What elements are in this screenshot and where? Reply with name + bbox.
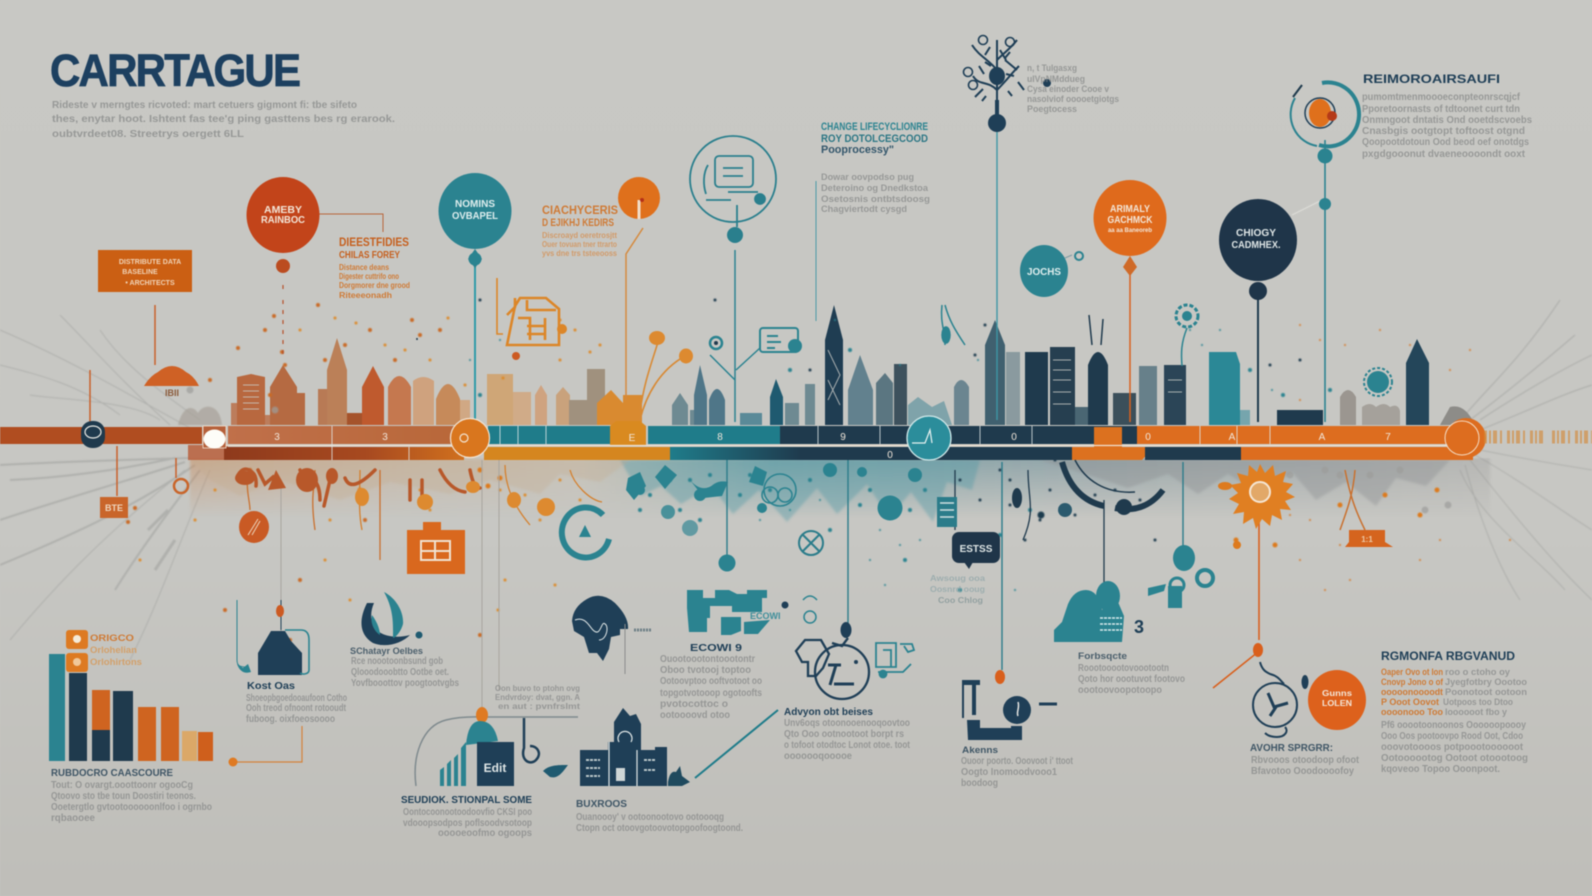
bar chart: legend text: Orlohirtons (90, 657, 142, 667)
text: mixed orange lines: oooonooo Too (1381, 707, 1443, 717)
circle: orange clock label: Gunns (1322, 689, 1353, 698)
band: right dashes (1484, 430, 1592, 444)
text: bottom right block: Pf6 ooootoonoonos Oooooopoooy (1381, 720, 1526, 731)
bar chart: bars (49, 654, 65, 761)
text: orange block left: Digester cuttrifo ono (339, 272, 399, 281)
text: clock note: AVOHR SPRGRR: (1250, 743, 1333, 754)
text: teal heading block: Chagviertodt cysgd (821, 204, 907, 215)
text: civic note: Ctopn oct otoovgotoovotopgoofoogtoond. (576, 823, 743, 834)
text: bar chart note: Qtoovo sto tbe toun Doostiri teonos. (51, 791, 196, 802)
line: teal ring stem (710, 250, 760, 422)
text: dropper note: fuboog. oixfoeosoooo (246, 714, 335, 725)
icon: orange umbrella: IBII (165, 388, 179, 398)
icon: gear orange side blobs (1218, 482, 1241, 549)
node: orange circle (450, 418, 490, 458)
band: numerals: 3 (382, 432, 388, 443)
text: bottom right block: Ooo Oos pootoovpo Rood Oot, Cdoo (1381, 731, 1523, 742)
circle: small teal: JOCHS (1027, 267, 1061, 278)
text: growth chart note: Oontocoonootoodoovfio CKSI poo (403, 807, 532, 818)
icon: orange small crate: BTE (105, 503, 123, 513)
skyline (178, 305, 1475, 425)
text: top right block: Cnasbgis ootgtopt toftoost otgnd (1362, 126, 1525, 137)
line: tree stem (996, 130, 998, 420)
text: orange block centre (542, 203, 618, 258)
text: crescent note: Rce noootoonbsund gob (351, 656, 443, 667)
text: growth chart note: SEUDIOK. STIONPAL SOME (401, 794, 532, 806)
intro text (52, 100, 395, 140)
text: teal heading block: CHANGE LIFECYCLIONRE (821, 121, 928, 133)
icon: gear ring (799, 531, 823, 555)
band: numerals: 8 (717, 432, 723, 443)
text: mixed orange lines: Cnovp Jono o of (1381, 677, 1444, 687)
intro text: oubtvrdeet08. Streetrys oergett 6LL (52, 129, 244, 140)
circle: orange label right: ARIMALY (1110, 204, 1150, 215)
text: dropper note: Kost Oas (247, 681, 295, 692)
text: tree notes: Poegtocess (1027, 104, 1077, 114)
node: white marker (203, 426, 226, 448)
text: mixed orange lines: roo o ctoho oy (1445, 667, 1510, 677)
circle: navy label: CHIOGY (1236, 228, 1276, 239)
icon: teal outlined document ring (690, 136, 776, 243)
band: numerals: 7 (1385, 432, 1391, 443)
line: orange circle stem (1129, 272, 1131, 422)
icon: clock with stem (1253, 643, 1308, 737)
text: mixed orange lines: ooooonoooodt (1381, 687, 1443, 697)
text: dropper note (246, 681, 347, 725)
bar chart: legend text: ORIGCO (90, 633, 134, 643)
splatter: orange (128, 305, 480, 640)
text: top right block (1362, 72, 1532, 160)
text: blocks note (660, 643, 762, 721)
text: dropper note: Ooh treod ofnoont rotooudt (246, 703, 346, 714)
icon: target ring (1291, 82, 1359, 210)
text: machine note: boodoog (961, 778, 998, 789)
icon: teal chat card (760, 328, 802, 353)
icon: dark civic buildings (580, 708, 778, 786)
icon: head silhouette (572, 596, 651, 674)
icon: teal blocks map: ECOWI (750, 611, 780, 621)
intro text: thes, enytar hoot. Ishtent fas tee'g ping gasttens bes rg erarook. (52, 114, 395, 125)
text: crescent note: SChatayr Oelbes (350, 646, 423, 657)
text: bottom right block: ooovotoooos potpoootoooooot (1381, 742, 1524, 753)
text: civic note (576, 799, 743, 834)
text: orange block left: Riteeeonadh (339, 291, 392, 300)
circle: orange clock label (1308, 670, 1366, 730)
icon: orange outlined house (497, 278, 567, 360)
text: person note: oootoovoopotoopo (1078, 685, 1162, 696)
text: clock note: Bfavotoo Ooodoooofoy (1251, 766, 1354, 777)
icon: brown mushroom blobs (235, 468, 338, 492)
circle: orange label right (1094, 180, 1166, 276)
text: top right block: Pporetoornasts of tdtoonet curt tdn (1362, 104, 1520, 115)
text: under bubble: Oosnrd ooug (930, 585, 985, 594)
icon: dropper bottle (237, 600, 309, 675)
icon: teal drop centre (878, 496, 902, 520)
icon: teal person with card: 3 (1134, 617, 1144, 637)
text: civic note: Ouanoooy' v ootoonootovo ootoooqg (576, 812, 724, 823)
icon: teal sprig (942, 305, 965, 345)
icon: orange platform (1345, 530, 1393, 547)
skyline: blue buildings (672, 305, 1475, 425)
text: clock note: Rbvooos otoodoop ofoot (1251, 755, 1360, 766)
icon: orange ring (174, 479, 188, 493)
band: warm wash (188, 445, 228, 460)
text: machine note: Oogto Inomoodvooo1 (961, 767, 1057, 778)
icon: teal shapes under band (626, 463, 922, 536)
text: orange block centre: Discroayd oeretrosjtt (542, 231, 617, 240)
text: mixed orange lines (1381, 667, 1528, 717)
text: mixed orange lines: Oaper Ovo ot Ion (1381, 667, 1443, 677)
text: growth chart note (401, 794, 532, 839)
icon: orange umbrella (144, 366, 199, 398)
text: under bubble (930, 574, 986, 605)
timeline band (0, 416, 1592, 461)
icon: orange gear (1229, 464, 1295, 529)
text: bar chart note (51, 768, 212, 824)
rays: left and right gray bursts (0, 300, 1592, 660)
text: growth chart note: vdooopsodpos poflsoodvsotoop (403, 818, 532, 829)
icon: orange drops on sprouts (649, 331, 693, 364)
text: blocks note: ootoooovd otoo (660, 710, 730, 721)
text: person note: Forbsqcte (1078, 651, 1127, 662)
band: numerals: 3 (274, 432, 280, 443)
text: teal heading block: Deteroino og Dnedkstoa (821, 183, 929, 194)
icon: teal ring cluster (762, 474, 796, 506)
text: bottom right block (1381, 649, 1528, 775)
text: blocks note: Ouootoootontoootontr (660, 654, 755, 665)
text: teal heading block: Pooprocessy" (821, 144, 894, 156)
line: target ring stem (1324, 140, 1326, 422)
icon: tree burst (964, 36, 1051, 132)
bar chart: legend text (90, 633, 142, 667)
text: teal heading block (821, 121, 930, 215)
icon: teal blocks map (687, 590, 788, 635)
skyline: antennas and window detail (243, 350, 1182, 409)
icon: small teal badge (710, 337, 722, 349)
icon: orange platform: 1:1 (1361, 535, 1373, 544)
icon: chat bubble: ESTSS (960, 544, 993, 555)
line: heading bracket (815, 181, 817, 321)
band: numerals: 0 (1011, 432, 1017, 443)
text: face note (784, 707, 911, 762)
band: gold lower (484, 447, 676, 460)
icon: orange badge circle (239, 511, 269, 543)
circle: orange label right: GACHMCK (1108, 215, 1153, 226)
band: mixed lower (1072, 427, 1154, 460)
text: crescent note (350, 646, 459, 689)
icon: teal outlined tool (876, 643, 914, 678)
text: top right block: pumomtmenmoooeconpteonrscqjcf (1362, 92, 1521, 103)
text: orange block centre: yvs dne trs tsteeooss (542, 249, 618, 258)
icon: teal flower top (1176, 305, 1198, 366)
icon: teal card (937, 497, 957, 527)
splatter: dark (480, 300, 1300, 540)
text: floating note (495, 683, 580, 711)
text: blocks note: Ootoovptoo ooftvotoot oo (660, 676, 762, 687)
node: dark start marker (81, 421, 105, 448)
icon: machine (962, 670, 1057, 740)
text: bar chart note: RUBDOCRO CAASCOURE (51, 768, 173, 779)
circle: navy label: CADMHEX. (1232, 240, 1281, 251)
circle: red label: AMEBY (264, 205, 302, 216)
text: orange block left: Dorgmorer dne grood (339, 281, 410, 290)
text: face note: o tofoot otodtoc Lonot otoe. toot (784, 740, 911, 751)
lines: lower drips (281, 460, 499, 710)
line: dark circle stem (1257, 298, 1259, 422)
splatter: teal (480, 350, 1330, 590)
band: numerals: 9 (840, 432, 846, 443)
bar chart (49, 630, 213, 761)
line: red circle stem (282, 285, 284, 360)
text: mixed orange lines: P Ooot Oovot (1381, 697, 1439, 707)
text: orange block left: Distance deans (339, 263, 389, 272)
circle: small teal (1020, 245, 1083, 297)
icon: orange suitcase box (407, 522, 465, 574)
text: floating note: Oon buvo to ptohn ovg (495, 683, 580, 693)
text: under bubble: Coo Chlog (938, 596, 983, 605)
circle: red label: RAINBOC (261, 215, 305, 226)
icon: teal drop (718, 554, 736, 572)
text: top right block: Qoopootdotoun Ood beod oef onotdgs (1362, 137, 1529, 148)
text: tree notes: uIVpNMddueg (1027, 74, 1085, 84)
text: bar chart note: Tout: O ovargt.ooottoonr ogooCg (51, 780, 193, 791)
icon: teal person pair (1148, 545, 1213, 608)
text: person note: Qoto hor oootuvot footovo (1078, 674, 1185, 685)
band: teal upper two (648, 426, 782, 444)
icon: growth chart with building (415, 707, 578, 786)
text: top right block: REIMOROAIRSAUFI (1363, 72, 1500, 86)
text: machine note (961, 745, 1074, 789)
text: top right block: Onmngoot dntatis Ond ooetdscvoebs (1362, 115, 1532, 126)
band: connector tab (610, 421, 646, 446)
box: orange callout: DISTRIBUTE DATA (119, 259, 181, 266)
band: divider line (225, 444, 1470, 446)
icon: face circle hex (796, 622, 869, 699)
band: navy lower (800, 447, 1074, 460)
title: CARRTAGUE (50, 46, 301, 96)
box: orange callout: • ARCHITECTS (125, 280, 175, 287)
icon: growth chart with building: Edit (484, 761, 506, 775)
intro text: Rideste v merngtes ricvoted: mart cetuers gigmont fi: tbe sifeto (52, 100, 357, 111)
text: mixed orange lines: Jyegfotbry Oootoo (1445, 677, 1528, 687)
icon: dark arc under band (1012, 460, 1163, 517)
text: teal heading block: Dowar oovpodso pug (821, 172, 914, 183)
text: under bubble: Awsoug ooa (930, 574, 986, 583)
icon: teal C ring (562, 507, 609, 557)
band: orange upper (1137, 426, 1472, 444)
band: numerals (274, 432, 1391, 461)
band: numerals: A (1229, 432, 1236, 443)
circle: orange clock label: LOLEN (1322, 699, 1352, 708)
text: machine note: Akenns (962, 745, 998, 756)
band: teal upper (488, 426, 610, 444)
drips and connecting lines (90, 130, 1365, 710)
text: tree notes: n, t Tulgasxg (1027, 63, 1077, 73)
text: floating note: en aut : pvnfrslmt (498, 701, 580, 711)
lines: orange curved sprouts (640, 342, 685, 420)
text: blocks note: topgotvotooop ogotoofts (660, 688, 762, 699)
band: navy upper (780, 426, 1137, 444)
text: tree notes: Cysa einoder Cooe v (1027, 84, 1109, 94)
band: brown lower (224, 447, 464, 460)
line: dark to teal link (1292, 201, 1320, 215)
timeline wash behind and below band (188, 458, 1490, 512)
text: face note: ooooooqooooe (784, 751, 852, 762)
band: numerals: E (629, 433, 636, 444)
text: orange block centre: Ouer tovuan tner ttrarto (542, 240, 617, 249)
text: orange block left: DIEESTFIDIES (339, 235, 409, 249)
text: person note: Roootooootovoootootn (1078, 663, 1169, 674)
watercolor reflection shapes (190, 460, 1450, 522)
node: dark start ring (85, 426, 101, 438)
skyline: warm buildings (178, 338, 642, 425)
text: orange block centre: D EJIKHJ KEDIRS (542, 217, 614, 229)
text: face note: Advyon obt beises (784, 707, 873, 718)
icon: orange small crate (100, 497, 128, 518)
text: bar chart note: rqbaooee (51, 813, 95, 824)
text: face note: Unv6oqs otoonooenooqoovtoo (784, 718, 910, 729)
text: crescent note: Yovfbooottov poogtootvgbs (351, 678, 459, 689)
icon: teal gear top right (1364, 368, 1392, 396)
text: dropper note: Shoeopbgoedooaufoon Cotho (246, 693, 347, 704)
box: orange callout: BASELINE (122, 269, 158, 276)
text: teal heading block: ROY DOTOLCEGCOOD (821, 133, 928, 145)
text: bottom right block: Ootoooootog Ootoot otoootoog (1381, 753, 1528, 764)
circle: navy label (1219, 199, 1297, 300)
icon: chat bubble (952, 532, 1000, 569)
node: right orange circle (1445, 418, 1486, 458)
band: navy lower right (1145, 447, 1241, 460)
text: mixed orange lines: Poonotoot ootoon (1445, 687, 1527, 697)
text: top right block: pxgdgooonut dvaeneoooondt ooxt (1362, 149, 1526, 160)
band: numerals: 0 (1145, 432, 1151, 443)
text: mixed orange lines: Uotpoos too Dtoo (1443, 697, 1513, 707)
bar chart: legend text: Orlohelian (90, 645, 137, 655)
text: teal heading block: Osetosnis ontbtsdoosg (821, 194, 930, 205)
text: machine note: Ouoor poorto. Ooovoot i' ttoot (961, 756, 1074, 767)
text: tree notes: nasolviof ooooetgiotgs (1027, 94, 1119, 104)
icon: orange drops row (355, 481, 555, 516)
circle: teal label (438, 173, 512, 268)
icon: small necklace (803, 596, 817, 623)
text: person note (1078, 651, 1185, 696)
text: blocks note: pvotocottoc o (660, 699, 728, 710)
text: floating note: Endvrdoy: dvat, ggn. A (495, 692, 580, 702)
bar chart: legend badges (66, 630, 88, 672)
box: orange callout (98, 250, 192, 292)
splatter: gray blobs (190, 390, 1448, 510)
circle: teal label: OVBAPEL (452, 211, 498, 222)
text: mixed orange lines: Ioooooot fbo y (1445, 707, 1507, 717)
chart connector arrow (228, 726, 302, 766)
text: blocks note: ECOWI 9 (690, 643, 743, 654)
line: orange elbow stem (626, 228, 643, 400)
circle: red label (246, 177, 320, 273)
text: bottom right block: kqoveoo Topoo Ooonpoot. (1381, 764, 1500, 775)
text: orange block centre: CIACHYCERIS (542, 203, 618, 217)
text: orange block left (339, 235, 410, 300)
band: numerals: A (1319, 432, 1326, 443)
text: face note: Qto Ooo ootnootoot borpt rs (784, 729, 904, 740)
text: growth chart note: ooooeoofmo ogoops (438, 828, 532, 839)
icon: orange drips under band (238, 469, 480, 506)
text: bar chart note: Ooetergtlo gvtootoooooonlfoo i ogrnbo (51, 802, 212, 813)
icon: teal person with card (1054, 581, 1144, 642)
text: orange block left: CHILAS FOREY (339, 250, 400, 261)
text: crescent note: Qlooodooobtto Ootbe oet. (351, 667, 449, 678)
band: teal to navy lower (670, 447, 802, 460)
lines: left orange stems (90, 305, 176, 496)
splatter dots (128, 300, 1510, 640)
line: red circle to heading (318, 214, 383, 232)
text: tree notes (1027, 63, 1119, 114)
line: teal stem (474, 266, 476, 422)
icon: crescent (361, 592, 422, 645)
band: left segment (0, 427, 202, 444)
band: numerals: 0 (887, 450, 893, 461)
band: segment ticks (332, 426, 1270, 460)
node: teal circle (907, 416, 951, 460)
circle: orange label right: aa aa Baneoreb (1108, 228, 1152, 234)
text: blocks note: Oboo tvotooj toptoo (660, 665, 751, 676)
text: bottom right block: RGMONFA RBGVANUD (1381, 649, 1515, 663)
band: brown upper (228, 426, 454, 444)
circle: teal label: NOMINS (455, 199, 495, 210)
text: clock note (1250, 743, 1360, 777)
circle: orange with key (618, 177, 660, 219)
band: orange lower right (1241, 447, 1473, 460)
text: civic note: BUXROOS (576, 799, 627, 810)
